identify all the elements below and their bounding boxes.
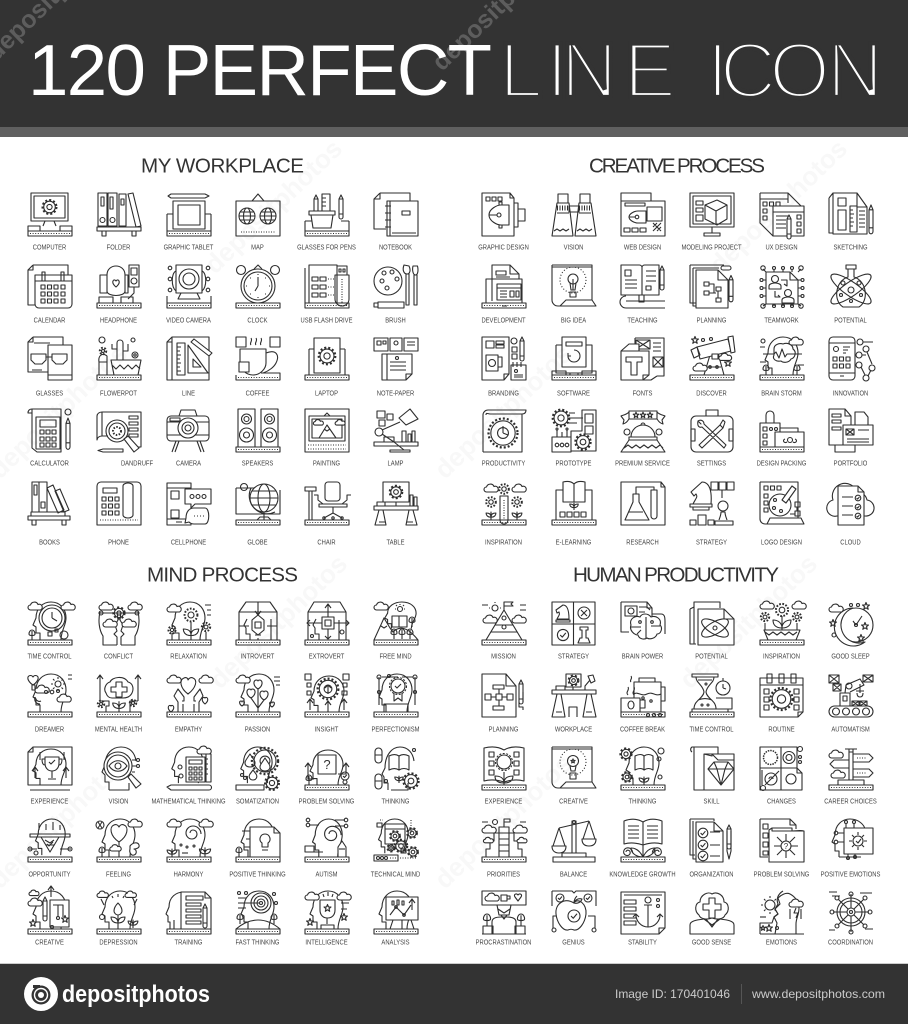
icon: vision: VISION: [564, 244, 584, 252]
icon: laptop: LAPTOP: [315, 390, 338, 398]
icon: skill: [691, 747, 734, 806]
icon: knowledge growth: [609, 819, 676, 879]
heading: mind process: MIND PROCESS: [147, 564, 298, 586]
icon: creative: [552, 747, 596, 806]
icon: positive emotions: POSITIVE EMOTIONS: [821, 871, 881, 879]
icon: flowerpot: FLOWERPOT: [100, 390, 137, 398]
icon: genius: [552, 891, 596, 947]
icon: procrastination: PROCRASTINATION: [476, 939, 532, 947]
icon: strategy: STRATEGY: [696, 539, 728, 547]
icon: experience: [28, 747, 72, 806]
icon: problem solving: PROBLEM SOLVING: [299, 798, 354, 806]
icon: time control: TIME CONTROL: [27, 653, 72, 661]
icon: brain power: [621, 602, 665, 661]
icon: skill: SKILL: [704, 798, 720, 806]
icon: potential: [690, 602, 734, 661]
faint watermarks: [0, 133, 853, 894]
faint watermarks: depositphotos: [703, 133, 853, 279]
icon: dandruff: [97, 412, 153, 468]
icon: inspiration: [760, 601, 806, 661]
icon: strategy: [552, 602, 595, 661]
icon: experience: EXPERIENCE: [485, 798, 523, 806]
icon: mission: [482, 602, 526, 661]
icon: brain storm: BRAIN STORM: [761, 390, 802, 398]
icon: changes: CHANGES: [767, 798, 796, 806]
icon: analysis: [374, 891, 418, 947]
icon: development: DEVELOPMENT: [481, 317, 526, 325]
icon: intelligence: INTELLIGENCE: [305, 939, 348, 947]
icon: workplace: [552, 674, 596, 734]
icon: prototype: PROTOTYPE: [556, 460, 592, 468]
icon: creative: [28, 886, 72, 947]
icon: good sleep: GOOD SLEEP: [831, 653, 870, 661]
icon: laptop: [305, 338, 349, 398]
icon: vision: [102, 747, 141, 806]
icon: discover: [690, 336, 735, 398]
icon: workplace: WORKPLACE: [555, 726, 593, 734]
icon: inspiration: INSPIRATION: [763, 653, 800, 661]
icon: settings: [691, 410, 733, 468]
icon: inspiration: [482, 484, 526, 547]
icon: research: [621, 482, 665, 547]
icon: table: [374, 482, 418, 547]
icon: teaching: [620, 265, 665, 325]
icon: coffee: [236, 337, 280, 398]
footer band: [0, 963, 908, 1024]
icon: introvert: INTROVERT: [241, 653, 274, 661]
icon: perfectionism: PERFECTIONISM: [371, 726, 420, 734]
icon: teamwork: TEAMWORK: [764, 317, 799, 325]
icon: insight: [305, 674, 349, 734]
icon: routine: ROUTINE: [768, 726, 795, 734]
icon: glasses: GLASSES: [36, 390, 64, 398]
icon: training: TRAINING: [175, 939, 202, 947]
icon: creative: CREATIVE: [35, 939, 64, 947]
icon: software: [552, 337, 596, 398]
icon: fast thinking: FAST THINKING: [236, 939, 279, 947]
icon: perfectionism: [371, 674, 420, 734]
icon: vision: [552, 194, 596, 252]
icon: organization: [689, 819, 734, 879]
icon: premium service: [615, 411, 670, 468]
icon: changes: [760, 746, 802, 806]
icon: career choices: [824, 749, 877, 806]
icon: usb flash drive: [301, 265, 353, 325]
icon: web design: WEB DESIGN: [624, 244, 661, 252]
icon: technical mind: TECHNICAL MIND: [371, 871, 420, 879]
icon: harmony: [167, 819, 213, 879]
faint watermarks: depositphotos: [198, 133, 348, 279]
icon: vision: VISION: [109, 798, 129, 806]
icon: knowledge growth: KNOWLEDGE GROWTH: [609, 871, 676, 879]
faint watermarks: depositphotos: [428, 338, 578, 484]
icon: positive thinking: [229, 819, 286, 879]
icon: planning: PLANNING: [489, 726, 518, 734]
icon: notebook: [374, 193, 418, 252]
icon: creative: CREATIVE: [559, 798, 588, 806]
icon: insight: INSIGHT: [315, 726, 338, 734]
icon: coordination: [828, 892, 873, 947]
icon: planning: PLANNING: [697, 317, 726, 325]
faint watermarks: depositphotos: [203, 548, 353, 694]
icon: note-paper: [374, 338, 418, 398]
icon: conflict: CONFLICT: [104, 653, 133, 661]
icon: thinking: THINKING: [382, 798, 409, 806]
icon: mathematical thinking: MATHEMATICAL THINKING: [151, 798, 226, 806]
icon: dreamer: [28, 674, 72, 734]
icon: glasses for pens: [297, 194, 356, 252]
icon: inspiration: INSPIRATION: [485, 539, 522, 547]
icon: folder: [97, 193, 141, 252]
icon: thinking: [375, 747, 419, 806]
icon: problem solving: PROBLEM SOLVING: [754, 871, 809, 879]
icon: productivity: [482, 410, 526, 468]
icon: e-learning: [552, 481, 596, 547]
icon: research: RESEARCH: [626, 539, 659, 547]
icon: portfolio: [829, 409, 873, 468]
icon: calculator: CALCULATOR: [30, 460, 69, 468]
icon: notebook: NOTEBOOK: [379, 244, 413, 252]
icon: potential: POTENTIAL: [695, 653, 728, 661]
icon: harmony: HARMONY: [174, 871, 204, 879]
icon: development: [481, 265, 526, 325]
icon: video camera: VIDEO CAMERA: [166, 317, 211, 325]
icon: extrovert: [305, 602, 349, 661]
icon: cellphone: [167, 483, 211, 547]
icon: lamp: LAMP: [388, 460, 404, 468]
icon: globe: GLOBE: [247, 539, 268, 547]
icon: time control: TIME CONTROL: [689, 726, 734, 734]
icon: teaching: TEACHING: [627, 317, 658, 325]
icon: positive emotions: [821, 819, 881, 879]
icon: somatization: [236, 747, 279, 806]
icon: opportunity: [28, 819, 72, 879]
icon: time control: [27, 602, 75, 661]
icon: problem solving: ?: [323, 757, 331, 772]
icon: branding: [482, 337, 526, 398]
icon: coordination: COORDINATION: [828, 939, 873, 947]
icon: brush: [374, 265, 418, 325]
icon: portfolio: PORTFOLIO: [834, 460, 867, 468]
brand name: depositphotos: [62, 981, 210, 1008]
icon: graphic tablet: [164, 194, 213, 252]
icon: folder: FOLDER: [107, 244, 131, 252]
icon: ux design: UX DESIGN: [765, 244, 798, 252]
panel: my workplace: [28, 154, 418, 547]
icon: teamwork: [760, 266, 804, 325]
icon: introvert: [236, 602, 280, 661]
icon: strategy: STRATEGY: [558, 653, 590, 661]
icon: painting: [305, 409, 349, 468]
icon: graphic design: [478, 193, 529, 252]
icon: headphone: HEADPHONE: [100, 317, 138, 325]
icon: mental health: MENTAL HEALTH: [95, 726, 142, 734]
icon: problem solving: [299, 750, 354, 806]
icon: graphic design: GRAPHIC DESIGN: [478, 244, 529, 252]
icon: design packing: DESIGN PACKING: [757, 460, 806, 468]
title: line icon: LINEICON: [499, 26, 883, 114]
icon: conflict: [99, 602, 142, 661]
icon: phone: PHONE: [108, 539, 129, 547]
icon: fonts: FONTS: [633, 390, 653, 398]
icon: experience: [482, 747, 526, 806]
icon: strategy: [690, 482, 734, 547]
icon: innovation: INNOVATION: [833, 390, 868, 398]
icon: technical mind: [371, 819, 420, 879]
icon: big idea: [552, 265, 596, 325]
icon: priorities: PRIORITIES: [487, 871, 521, 879]
icon: priorities: [482, 819, 527, 879]
icon: fast thinking: [236, 891, 280, 947]
icon: dreamer: DREAMER: [35, 726, 64, 734]
icon: settings: SETTINGS: [697, 460, 727, 468]
icon: positive thinking: POSITIVE THINKING: [229, 871, 286, 879]
icon: empathy: [167, 675, 213, 734]
icon: modeling project: [681, 193, 742, 252]
icon: intelligence: [305, 891, 351, 947]
icon: speakers: [236, 409, 280, 468]
icon: balance: BALANCE: [560, 871, 588, 879]
icon: logo design: [760, 482, 804, 547]
icon: automatism: [829, 675, 873, 734]
icon: relaxation: [167, 602, 211, 661]
icon: e-learning: E-LEARNING: [556, 539, 591, 547]
icon: computer: [28, 193, 72, 252]
icon: good sense: GOOD SENSE: [692, 939, 732, 947]
icon: speakers: SPEAKERS: [242, 460, 274, 468]
icon: autism: AUTISM: [315, 871, 338, 879]
icon: camera: [167, 410, 209, 468]
icon: modeling project: MODELING PROJECT: [681, 244, 742, 252]
heading: human productivity: HUMAN PRODUCTIVITY: [573, 564, 779, 586]
icon: free mind: [374, 602, 418, 661]
icon: innovation: [829, 337, 875, 398]
icon: brush: BRUSH: [385, 317, 406, 325]
header band: [0, 0, 908, 137]
icon: time control: [689, 674, 734, 734]
icon: routine: [760, 674, 803, 734]
icon: cloud: CLOUD: [840, 539, 861, 547]
icon: line: LINE: [182, 390, 196, 398]
icon: depression: DEPRESSION: [99, 939, 138, 947]
website: www.depositphotos.com: [751, 987, 885, 1001]
icon: ux design: [760, 193, 804, 252]
icon: phone: [97, 482, 141, 547]
icon: good sleep: [829, 602, 873, 661]
icon: mission: MISSION: [491, 653, 516, 661]
icon: line: [167, 337, 212, 398]
icon: procrastination: [476, 891, 532, 947]
icon: extrovert: EXTROVERT: [309, 653, 344, 661]
icon: stability: STABILITY: [628, 939, 657, 947]
icon: coffee break: [620, 676, 666, 734]
icon: glasses for pens: GLASSES FOR PENS: [297, 244, 356, 252]
icon: passion: PASSION: [245, 726, 270, 734]
icon: map: [236, 194, 280, 252]
icon: relaxation: RELAXATION: [170, 653, 207, 661]
icon: painting: PAINTING: [313, 460, 340, 468]
icon: discover: DISCOVER: [696, 390, 727, 398]
icon: feeling: [96, 819, 142, 879]
icon: big idea: BIG IDEA: [561, 317, 587, 325]
icon: mental health: [95, 675, 142, 734]
icon: video camera: [166, 265, 211, 325]
icon: autism: [305, 818, 349, 879]
icon: dandruff: DANDRUFF: [121, 460, 153, 468]
icon: calendar: [28, 265, 72, 325]
icon: free mind: FREE MIND: [379, 653, 412, 661]
icon: cellphone: CELLPHONE: [171, 539, 207, 547]
icon: note-paper: NOTE-PAPER: [377, 390, 414, 398]
icon: chair: CHAIR: [317, 539, 336, 547]
icon: emotions: EMOTIONS: [766, 939, 798, 947]
icon: map: MAP: [251, 244, 264, 252]
icon: globe: [236, 484, 280, 547]
icon: coffee: COFFEE: [246, 390, 270, 398]
icon: somatization: SOMATIZATION: [236, 798, 279, 806]
divider: [741, 984, 742, 1004]
icon: web design: [621, 193, 665, 252]
icon: thinking: [620, 747, 665, 806]
icon: analysis: ANALYSIS: [381, 939, 410, 947]
icon: potential: [827, 265, 875, 325]
icon: genius: GENIUS: [562, 939, 585, 947]
icon: balance: [552, 820, 596, 879]
panel: creative process: [478, 154, 875, 547]
icon: mathematical thinking: [151, 746, 226, 806]
icon: depositphotos logo: [24, 977, 58, 1011]
icon: logo design: LOGO DESIGN: [761, 539, 802, 547]
icon: emotions: [760, 891, 804, 947]
icon: thinking: THINKING: [629, 798, 656, 806]
icon: problem solving: ?: [784, 842, 789, 851]
icon: lamp: [374, 409, 418, 468]
icon: opportunity: OPPORTUNITY: [28, 871, 71, 879]
icon: good sense: [690, 893, 734, 947]
icon: stability: [621, 892, 665, 947]
faint watermarks: depositphotos: [673, 548, 823, 694]
faint watermarks: depositphotos: [428, 748, 578, 894]
icon: chair: [305, 482, 351, 547]
icon: sketching: [829, 193, 873, 252]
panel: human productivity: [476, 564, 881, 947]
icon: calculator: [28, 409, 71, 468]
icon: software: SOFTWARE: [557, 390, 590, 398]
icon: books: [28, 482, 70, 547]
icon: problem solving: [754, 819, 809, 879]
icon: graphic tablet: GRAPHIC TABLET: [164, 244, 213, 252]
heading: creative process: CREATIVE PROCESS: [589, 154, 765, 178]
icon: clock: [236, 265, 280, 325]
icon: productivity: PRODUCTIVITY: [482, 460, 526, 468]
icon: brain storm: [760, 337, 804, 398]
icon: calendar: CALENDAR: [34, 317, 66, 325]
icon: branding: BRANDING: [488, 390, 519, 398]
icon: automatism: AUTOMATISM: [831, 726, 870, 734]
icon: fonts: [621, 338, 664, 398]
title: 120 perfect: 120 PERFECT: [28, 30, 492, 111]
icon: headphone: [97, 265, 141, 325]
icon: usb flash drive: USB FLASH DRIVE: [301, 317, 353, 325]
icon: flowerpot: [97, 337, 141, 398]
icon: depression: [97, 891, 141, 947]
heading: my workplace: MY WORKPLACE: [141, 154, 304, 178]
icon: potential: POTENTIAL: [834, 317, 867, 325]
icon: passion: [236, 674, 280, 734]
image id: Image ID: 170401046: [615, 987, 730, 1001]
icon: premium service: PREMIUM SERVICE: [615, 460, 670, 468]
icon: table: TABLE: [386, 539, 405, 547]
icon: planning: [690, 265, 733, 325]
icon: sketching: SKETCHING: [833, 244, 868, 252]
icon: career choices: CAREER CHOICES: [824, 798, 877, 806]
panel: mind process: [27, 564, 420, 947]
icon: planning: [482, 674, 523, 734]
icon: brain power: BRAIN POWER: [622, 653, 663, 661]
icon: training: [166, 892, 211, 947]
icon: coffee break: COFFEE BREAK: [620, 726, 666, 734]
icon: books: BOOKS: [39, 539, 60, 547]
icon: experience: EXPERIENCE: [31, 798, 69, 806]
icon: glasses: [28, 337, 72, 398]
icon: computer: COMPUTER: [33, 244, 66, 252]
icon: empathy: EMPATHY: [175, 726, 203, 734]
icon: feeling: FEELING: [106, 871, 131, 879]
icon: prototype: [552, 410, 596, 468]
icon: cloud: [827, 483, 874, 547]
icon: design packing: [757, 411, 806, 468]
icon: organization: ORGANIZATION: [689, 871, 734, 879]
icon: clock: CLOCK: [247, 317, 268, 325]
icon: camera: CAMERA: [176, 460, 202, 468]
